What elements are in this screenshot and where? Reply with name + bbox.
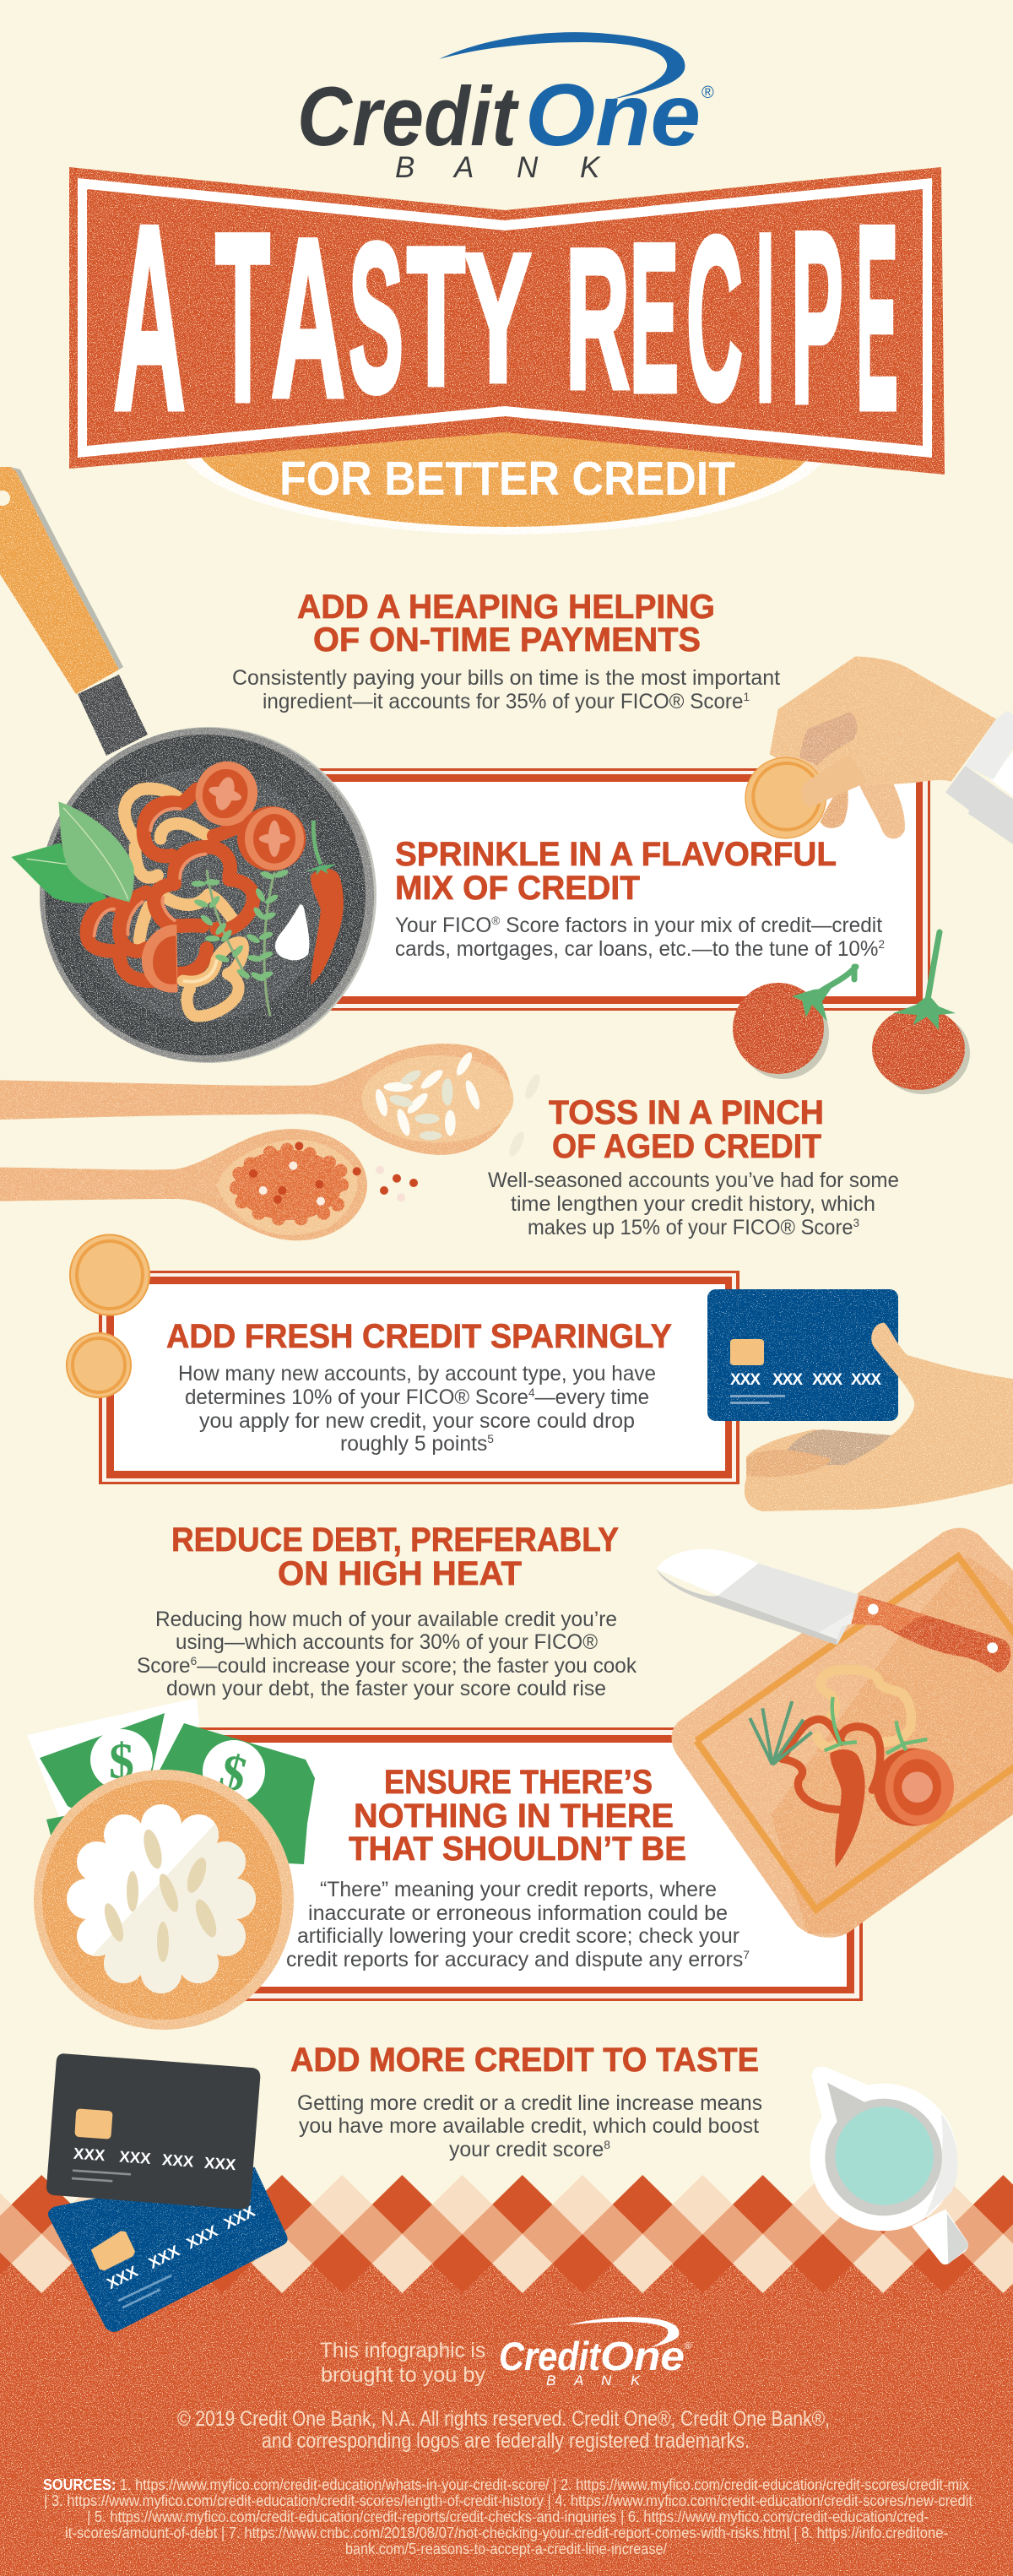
- section: more credit: [290, 2042, 762, 2161]
- heading: A TASTY RECIPE: C: [686, 189, 743, 448]
- logo: white Credit One Bank: Credit: [499, 2334, 602, 2378]
- body text: inaccurate or erroneous information could be: [308, 1901, 728, 1925]
- illustration: credit cards: [46, 2053, 288, 2332]
- subtitle: FOR BETTER CREDIT: [279, 452, 735, 506]
- heading: A TASTY RECIPE: I: [756, 184, 775, 452]
- heading: TOSS IN A PINCH: [549, 1094, 824, 1131]
- body text: [395, 914, 885, 961]
- logo: white Credit One Bank: N: [601, 2373, 612, 2389]
- body text: roughly 5 points: [340, 1432, 490, 1456]
- body text: ®: [491, 914, 501, 927]
- body text: 7: [743, 1948, 750, 1961]
- heading: ADD MORE CREDIT TO TASTE: [290, 2042, 759, 2079]
- blue card: XXX: [851, 1371, 881, 1389]
- heading: ENSURE THERE’S: [384, 1764, 653, 1801]
- body text: [488, 1169, 899, 1239]
- thumb over coin: [801, 754, 867, 808]
- pan body: [41, 727, 376, 1063]
- heading: OF AGED CREDIT: [552, 1128, 821, 1165]
- illustration: dollar bills: $: [109, 1733, 134, 1789]
- half tomato slice: [142, 925, 178, 993]
- body text: Consistently paying your bills on time is the most important: [232, 666, 780, 690]
- heading: [549, 1094, 824, 1165]
- body text: Score factors in your mix of credit—credit: [500, 914, 882, 937]
- illustration: wooden spoons: [0, 1044, 543, 1240]
- black card: XXX: [161, 2150, 195, 2171]
- body text: makes up 15% of your FICO® Score: [528, 1216, 870, 1239]
- body text: your credit score: [449, 2138, 605, 2161]
- logo: white Credit One Bank: B: [546, 2373, 555, 2389]
- rice: [67, 1804, 256, 1993]
- logo: Credit One Bank: N: [517, 151, 539, 184]
- chili pepper: [306, 821, 344, 985]
- logo: Credit One Bank: K: [580, 151, 601, 184]
- pan handle: [0, 467, 119, 694]
- heading: A TASTY RECIPE: A: [113, 171, 186, 465]
- text: brought to you by: This infographic is: [320, 2339, 485, 2362]
- body text: How many new accounts, by account type, you have: [178, 1362, 656, 1386]
- illustration: measuring cup: [810, 2067, 968, 2264]
- body text: —could increase your score; the faster you cook: [197, 1654, 637, 1678]
- body text: Well-seasoned accounts you’ve had for some: [488, 1169, 899, 1192]
- heading: ADD FRESH CREDIT SPARINGLY: [166, 1318, 672, 1355]
- logo: white Credit One Bank: One: [600, 2335, 685, 2379]
- heading: REDUCE DEBT, PREFERABLY: [171, 1521, 619, 1559]
- heading: SPRINKLE IN A FLAVORFUL: [395, 836, 837, 873]
- section: aged credit: [488, 1094, 899, 1239]
- section: on-time payments: [232, 588, 780, 713]
- panel: mix of credit: [287, 768, 930, 1011]
- garlic drop: [275, 904, 309, 960]
- heading: [171, 1521, 619, 1592]
- body text: 4: [528, 1386, 535, 1399]
- body text: Score: [137, 1654, 192, 1678]
- body text: time lengthen your credit history, which: [511, 1192, 875, 1216]
- cream pepper: [817, 1669, 911, 1747]
- illustration: dollar bills: $: [214, 1743, 253, 1803]
- blue card: XXX: [730, 1371, 761, 1389]
- body text: credit reports for accuracy and dispute any errors: [286, 1948, 746, 1971]
- body text: [297, 2091, 762, 2161]
- blue card: XXX: [183, 2221, 220, 2253]
- logo: Credit One Bank: ®: [702, 84, 714, 102]
- black card: XXX: [203, 2154, 237, 2173]
- body text: Reducing how much of your available credit you’re: [155, 1608, 617, 1631]
- icon: coins: [66, 1234, 150, 1398]
- blue card: XXX: [145, 2242, 182, 2272]
- black card: [46, 2053, 260, 2210]
- illustration: dollar bills: [27, 1698, 315, 1870]
- logo: Credit One Bank: A: [452, 151, 474, 184]
- thyme sprigs: [191, 869, 290, 1016]
- heading: MIX OF CREDIT: [395, 870, 640, 907]
- body text: 2: [878, 937, 885, 951]
- coin: [745, 757, 826, 838]
- body text: [286, 1878, 750, 1971]
- body text: you have more available credit, which could boost: [299, 2114, 759, 2138]
- illustration: frying pan: [0, 467, 376, 1063]
- body text: artificially lowering your credit score; check your: [297, 1924, 739, 1948]
- text: brought to you by: brought to you by: [321, 2363, 485, 2387]
- logo: white Credit One Bank: [499, 2317, 691, 2389]
- cuff: [945, 711, 1013, 844]
- bottom cream pepper: [183, 942, 243, 1017]
- body text: —every time: [534, 1386, 649, 1409]
- body text: [178, 1362, 656, 1456]
- body text: 5: [487, 1432, 494, 1445]
- section: reduce debt: [137, 1521, 637, 1700]
- heading: [297, 588, 715, 659]
- body text: cards, mortgages, car loans, etc.—to the tune of 10%: [395, 937, 894, 961]
- logo: Credit One Bank: [297, 32, 714, 184]
- blue card: XXX: [772, 1371, 803, 1389]
- illustration: rice bowl: [34, 1770, 294, 2030]
- loose rice grains: [506, 1072, 543, 1158]
- body text: down your debt, the faster your score could rise: [166, 1677, 606, 1700]
- rice on spoon: [373, 1050, 483, 1137]
- ribbon: [69, 167, 945, 475]
- heading: A TASTY RECIPE: R: [566, 208, 630, 431]
- heading: A TASTY RECIPE: T: [215, 184, 270, 452]
- body text: 1: [743, 690, 750, 703]
- blue card: XXX: [221, 2202, 258, 2232]
- title banner: [69, 167, 945, 534]
- body text: Getting more credit or a credit line increase means: [297, 2091, 762, 2115]
- frame: [99, 1271, 739, 1484]
- tomato slices: [188, 754, 306, 871]
- spice on spoon: [230, 1143, 349, 1225]
- footer background with argyle pattern: [0, 2175, 1013, 2576]
- logo: Credit One Bank: One: [525, 67, 701, 165]
- body text: Your FICO: [395, 914, 494, 937]
- logo: Credit One Bank: Credit: [297, 69, 520, 163]
- heading: NOTHING IN THERE: [354, 1798, 674, 1835]
- hand palm: [770, 656, 996, 785]
- black card: XXX: [73, 2145, 106, 2164]
- body text: using—which accounts for 30% of your FICO®: [176, 1630, 599, 1654]
- panel: ensure nothing wrong: [169, 1727, 863, 2001]
- body text: [137, 1608, 637, 1700]
- logo: white Credit One Bank: A: [573, 2373, 583, 2389]
- frame: [169, 1727, 863, 2001]
- body text: ingredient—it accounts for 35% of your FICO® Score: [263, 690, 759, 713]
- copyright: © 2019 Credit One Bank, N.A. All rights reserved. Credit One®, Credit One Bank®,: [177, 2407, 830, 2431]
- black card: XXX: [119, 2147, 152, 2167]
- red pepper: [783, 1719, 880, 1809]
- illustration: cutting board: [656, 1528, 1013, 1938]
- red pepper rings: [87, 789, 253, 981]
- chili on board: [830, 1749, 865, 1868]
- body text: 3: [853, 1216, 859, 1229]
- logo: Credit One Bank: B: [395, 151, 414, 184]
- footer credit line with logo: [320, 2317, 691, 2389]
- heading: A TASTY RECIPE: E: [630, 200, 679, 437]
- cream pepper rings: [124, 789, 234, 940]
- heading: A TASTY RECIPE: S: [349, 200, 404, 437]
- heading: A TASTY RECIPE: [113, 171, 898, 465]
- heading: [395, 836, 837, 907]
- bowl behind banner: [177, 344, 832, 534]
- heading: A TASTY RECIPE: P: [791, 181, 843, 454]
- heading: [349, 1764, 686, 1868]
- blue card: XXX: [104, 2262, 141, 2292]
- basil leaves: [11, 801, 134, 903]
- sources: bank.com/5-reasons-to-accept-a-credit-line-increase/: [345, 2541, 667, 2557]
- blue card: [707, 1289, 898, 1421]
- illustration: tomatoes: [733, 932, 970, 1094]
- copyright: [177, 2407, 830, 2453]
- body text: “There” meaning your credit reports, where: [320, 1878, 717, 1901]
- body text: 6: [191, 1654, 197, 1668]
- logo: white Credit One Bank: ®: [685, 2341, 691, 2351]
- heading: ADD A HEAPING HELPING: [297, 588, 715, 626]
- body text: 8: [604, 2138, 610, 2151]
- knife: [656, 1549, 1010, 1673]
- stems: [814, 932, 940, 1005]
- blue card: [48, 2167, 288, 2332]
- fingers: [821, 783, 905, 838]
- illustration: hand dropping coin: [745, 656, 1013, 844]
- tomato on board: [874, 1721, 954, 1826]
- sources: it-scores/amount-of-debt | 7. https://www.cnbc.com/2018/08/07/not-checking-your-credit-report-comes-with-risks.html | 8. https://info.creditone-: [65, 2524, 948, 2541]
- heading: OF ON-TIME PAYMENTS: [313, 621, 701, 659]
- hand: [745, 1323, 1013, 1511]
- sources: | 5. https://www.myfico.com/credit-education/credit-reports/credit-checks-and-inquiries | 6. https://www.myfico.com/credit-education/cred-: [87, 2508, 929, 2525]
- logo: white Credit One Bank: K: [631, 2373, 641, 2389]
- blue card: XXX: [812, 1371, 842, 1389]
- body text: determines 10% of your FICO® Score: [185, 1386, 540, 1409]
- panel: fresh credit: [99, 1271, 739, 1484]
- vegetables drawn in crop coordinates: [11, 754, 344, 1017]
- illustration: hand holding blue card: [707, 1289, 1013, 1511]
- frame: [287, 768, 930, 1011]
- copyright: and corresponding logos are federally registered trademarks.: [262, 2429, 750, 2453]
- loose spice dots: [376, 1166, 418, 1201]
- text: brought to you by: [320, 2339, 485, 2387]
- heading: A TASTY RECIPE: T: [407, 207, 465, 426]
- heading: A TASTY RECIPE: A: [271, 191, 345, 444]
- heading: A TASTY RECIPE: Y: [465, 215, 531, 420]
- rice grains: [100, 1827, 220, 1962]
- sources: [43, 2476, 972, 2557]
- body text: you apply for new credit, your score could drop: [199, 1409, 635, 1433]
- rosemary: [750, 1701, 812, 1765]
- heading: ON HIGH HEAT: [278, 1555, 522, 1592]
- body text: [232, 666, 780, 713]
- heading: THAT SHOULDN’T BE: [349, 1830, 686, 1868]
